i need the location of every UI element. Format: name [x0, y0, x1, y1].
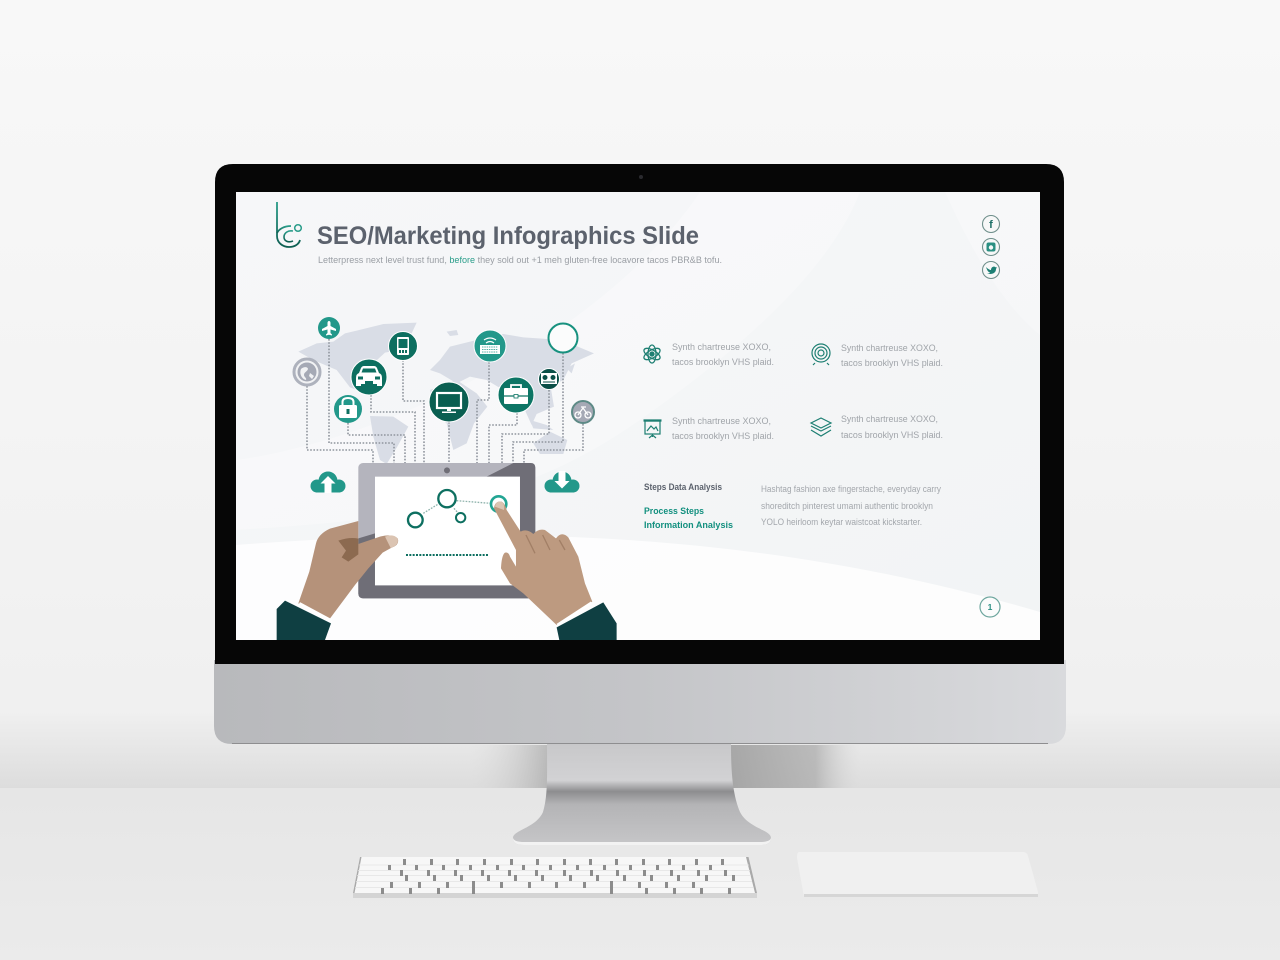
icon: car	[351, 359, 387, 395]
icon: wifi keyboard	[474, 330, 506, 362]
icon: target	[812, 344, 830, 365]
tablet frame	[358, 463, 535, 598]
right hand	[494, 502, 592, 625]
icon: airplane	[318, 317, 340, 339]
dotted connectors	[307, 339, 583, 463]
heading: steps data analysis: Steps Data Analysis	[644, 482, 722, 493]
feature text: Synth chartreuse XOXO,	[841, 414, 938, 424]
left cuff	[277, 601, 332, 640]
keyboard	[353, 857, 757, 898]
feature text line: tacos brooklyn VHS plaid.	[672, 431, 774, 441]
title: SEO/Marketing Infographics Slide	[317, 222, 699, 250]
icon: cloud upload	[310, 472, 346, 493]
right cuff	[557, 602, 617, 640]
tablet	[358, 463, 535, 598]
trackpad	[797, 852, 1038, 897]
tablet dark edges	[358, 463, 535, 598]
monitor stand	[513, 744, 771, 845]
slide screen	[236, 192, 1040, 640]
screen connector dots	[423, 501, 491, 513]
left hand	[298, 521, 398, 619]
paragraph: Hashtag fashion axe fingerstache, everyday carry	[761, 484, 941, 494]
icon: layers	[811, 418, 831, 436]
icon: presentation board	[644, 420, 662, 438]
paragraph	[761, 484, 941, 527]
icon: facebook: f	[989, 219, 993, 231]
hands	[277, 502, 617, 640]
paragraph: shoreditch pinterest umami authentic brooklyn	[761, 501, 933, 511]
icon: briefcase	[498, 377, 534, 413]
tablet screen	[375, 477, 520, 585]
icon: monitor	[429, 382, 469, 422]
key gaps	[381, 859, 735, 894]
logo	[277, 202, 301, 247]
icon: cloud download	[544, 471, 580, 492]
icon: twitter	[982, 262, 1000, 278]
icon: padlock	[334, 395, 362, 423]
tablet camera	[444, 467, 450, 473]
paragraph: YOLO heirloom keytar waistcoat kickstarter.	[761, 517, 922, 527]
feature text: Synth chartreuse XOXO,	[841, 343, 938, 353]
feature: layers	[811, 414, 938, 436]
heading: information analysis: Information Analysis	[644, 520, 733, 531]
feature text line: tacos brooklyn VHS plaid.	[841, 358, 943, 368]
social icons	[982, 216, 1000, 278]
monitor body	[214, 164, 1066, 744]
icon: instagram	[982, 238, 1000, 256]
screen circles	[408, 490, 506, 527]
feature: presentation	[644, 416, 771, 438]
icon: atom	[642, 345, 662, 363]
page number: 1	[988, 602, 993, 612]
page number	[980, 597, 1000, 617]
icon: globe	[294, 359, 320, 385]
heading: process steps: Process Steps	[644, 506, 704, 517]
icon: phone	[388, 332, 418, 360]
icon: empty ring	[548, 324, 578, 352]
subtitle: Letterpress next level trust fund, before they sold out +1 meh gluten-free locavore tacos PBR&B tofu.	[318, 255, 722, 265]
screen dotted line	[406, 552, 488, 558]
feature text: Synth chartreuse XOXO,	[672, 416, 771, 426]
feature: target	[812, 343, 938, 365]
feature: atom	[642, 342, 771, 363]
feature text line: tacos brooklyn VHS plaid.	[841, 430, 943, 440]
icon: bicycle	[572, 401, 594, 423]
feature text line: tacos brooklyn VHS plaid.	[672, 357, 774, 367]
icon: tape reels	[538, 368, 560, 390]
feature text: Synth chartreuse XOXO,	[672, 342, 771, 352]
world map	[298, 323, 594, 464]
